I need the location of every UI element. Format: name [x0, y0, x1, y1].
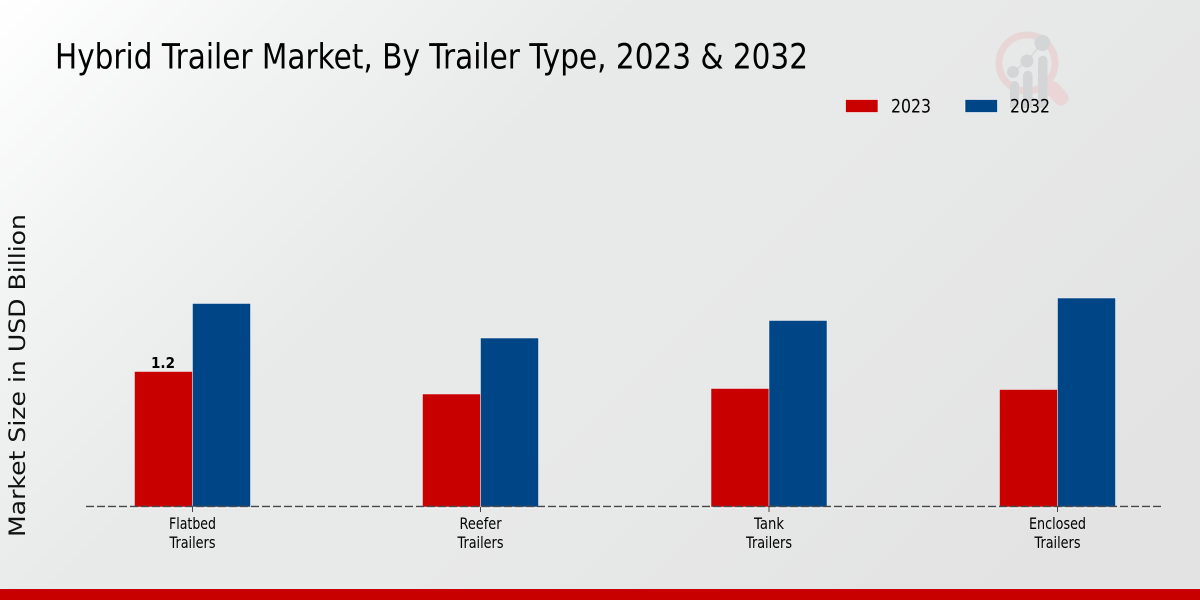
- bars: Reefer Trailers: [422, 338, 538, 507]
- bars: Tank Trailers: [711, 320, 827, 507]
- legend item: 2032: 2032: [1010, 96, 1050, 118]
- legend item: 2032: [965, 96, 1050, 118]
- category label: Flatbed Trailers: Flatbed: [169, 514, 216, 533]
- category label: Tank Trailers: [745, 514, 792, 552]
- category label: Tank Trailers: Trailers: [745, 533, 792, 552]
- category label: Flatbed Trailers: Trailers: [169, 533, 216, 552]
- category label: Reefer Trailers: Trailers: [457, 533, 504, 552]
- data label: 1.2: 1.2: [151, 354, 175, 372]
- legend item: 2023: [846, 96, 931, 118]
- category label: Flatbed Trailers: [169, 514, 216, 552]
- footer bar: [0, 589, 1200, 600]
- category label: Tank Trailers: Tank: [753, 514, 785, 533]
- category label: Reefer Trailers: Reefer: [460, 514, 502, 533]
- category label: Enclosed Trailers: [1029, 514, 1086, 552]
- y axis label: Market Size in USD Billion: [5, 214, 31, 537]
- category label: Reefer Trailers: [457, 514, 504, 552]
- bars: Flatbed Trailers: [134, 304, 250, 507]
- bars: Enclosed Trailers: [1000, 298, 1116, 507]
- category label: Enclosed Trailers: Enclosed: [1029, 514, 1086, 533]
- title: Hybrid Trailer Market, By Trailer Type, 2023 & 2032: [55, 38, 808, 78]
- bar chart: [86, 298, 1164, 512]
- category label: Enclosed Trailers: Trailers: [1034, 533, 1080, 552]
- icon: watermark logo: [999, 35, 1061, 108]
- legend: [846, 96, 1050, 118]
- legend item: 2023: 2023: [891, 96, 931, 118]
